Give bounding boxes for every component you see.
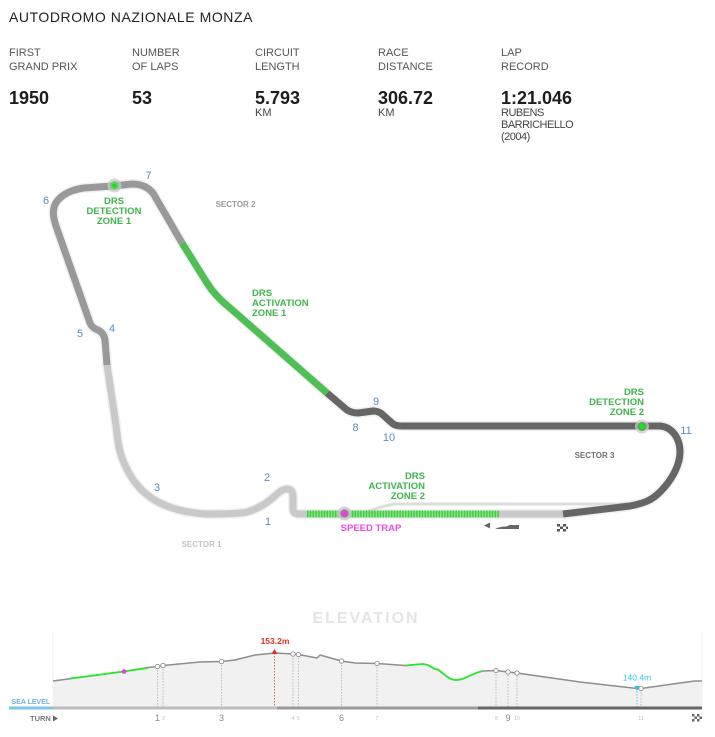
- sea level bar: [9, 706, 53, 710]
- track halo: [53, 184, 680, 514]
- turn markers: [155, 652, 643, 691]
- stat: first grand prix: 1950: [9, 88, 49, 108]
- turn numbers: 11: [680, 425, 692, 437]
- sector 1 track: [107, 365, 563, 514]
- turn numbers: 6: [43, 195, 49, 207]
- stat: lap record: LAP: [501, 46, 522, 58]
- label: DRS activation zone 2: DRS: [405, 471, 425, 482]
- turn axis labels: [155, 713, 644, 723]
- stat: number of laps: 53: [132, 88, 152, 108]
- stat: number of laps: OF LAPS: [132, 60, 178, 72]
- turn axis labels: 5: [297, 716, 300, 722]
- turn numbers: 2: [264, 472, 270, 484]
- label: DRS detection zone 1: DETECTION: [87, 206, 142, 217]
- lowest point: 140.4m: [623, 672, 651, 682]
- DRS segment 1: [70, 668, 148, 678]
- turn axis labels: 11: [638, 716, 644, 722]
- turn axis labels: 2: [162, 716, 165, 722]
- sector 1 bar: [53, 706, 277, 710]
- DRS detection point 2: [635, 420, 649, 434]
- turn numbers: 3: [154, 482, 160, 494]
- turn drop lines: [158, 655, 641, 707]
- label: DRS activation zone 1: ZONE 1: [252, 308, 287, 319]
- stat: circuit length: CIRCUIT: [255, 46, 300, 58]
- stat: first grand prix: FIRST: [9, 46, 41, 58]
- label: DRS detection zone 2: DETECTION: [589, 397, 644, 408]
- icon: finish flag: [692, 714, 702, 722]
- label: DRS activation zone 2: ACTIVATION: [368, 481, 425, 492]
- speed trap point: [338, 506, 352, 520]
- label: DRS activation zone 1: ACTIVATION: [252, 298, 309, 309]
- icon: direction arrow and car: [484, 522, 519, 529]
- sector 2 track: [53, 184, 182, 365]
- turn axis labels: 8: [495, 716, 498, 722]
- stat: lap record: (2004): [501, 131, 530, 143]
- turn numbers: 10: [383, 432, 395, 444]
- DRS segment 2: [405, 664, 483, 680]
- stat: lap record: [501, 46, 574, 143]
- DRS activation zone 2: [307, 510, 499, 518]
- turn numbers: 5: [77, 328, 83, 340]
- turn axis labels: 9: [505, 713, 511, 723]
- stat: circuit length: 5.793: [255, 88, 300, 108]
- stat: first grand prix: GRAND PRIX: [9, 60, 77, 72]
- sector labels: [182, 200, 615, 549]
- stat: race distance: 306.72: [378, 88, 433, 108]
- highest point: 153.2m: [261, 636, 290, 646]
- stat: number of laps: NUMBER: [132, 46, 180, 58]
- DRS activation zone 1: [182, 243, 327, 393]
- turn axis labels: 3: [219, 713, 224, 723]
- stat: lap record: RUBENS: [501, 107, 544, 119]
- stat: race distance: KM: [378, 107, 394, 119]
- stat: circuit length: LENGTH: [255, 60, 300, 72]
- stat: circuit length: KM: [255, 107, 272, 119]
- turn label: TURN: [30, 714, 51, 723]
- stat: race distance: DISTANCE: [378, 60, 433, 72]
- stat: race distance: RACE: [378, 46, 409, 58]
- label: DRS detection zone 1: ZONE 1: [97, 216, 132, 227]
- stat: first grand prix: [9, 46, 78, 108]
- sector labels: SECTOR 3: [575, 451, 615, 460]
- label: DRS detection zone 2: DRS: [624, 387, 644, 398]
- stat: lap record: RECORD: [501, 60, 549, 72]
- sector labels: SECTOR 1: [182, 540, 222, 549]
- turn axis labels: 4: [292, 716, 295, 722]
- label: speed trap: SPEED TRAP: [341, 523, 402, 534]
- elevation chart: [9, 632, 702, 723]
- turn numbers: 4: [109, 323, 115, 335]
- label: DRS detection zone 1: DRS: [104, 196, 124, 207]
- sector 2 bar: [277, 706, 478, 710]
- circuit map: [53, 178, 680, 520]
- elevation area: [53, 653, 702, 707]
- turn axis labels: 10: [514, 716, 520, 722]
- stat: lap record: BARRICHELLO: [501, 119, 573, 131]
- speed trap marker: [122, 669, 126, 674]
- sector labels: SECTOR 2: [216, 200, 256, 209]
- turn numbers: [43, 170, 692, 528]
- elevation heading: ELEVATION: [312, 610, 420, 627]
- title: AUTODROMO NAZIONALE MONZA: [9, 9, 253, 25]
- stat: race distance: [378, 46, 433, 119]
- elevation line: [53, 653, 702, 688]
- stat: lap record: 1:21.046: [501, 88, 572, 108]
- label: DRS activation zone 2: ZONE 2: [391, 491, 425, 502]
- turn axis labels: 6: [339, 713, 344, 723]
- icon: chequered flag: [557, 524, 568, 532]
- turn axis labels: 7: [376, 716, 379, 722]
- DRS detection point 1: [108, 178, 122, 192]
- highest point: [261, 636, 290, 707]
- lowest point: [623, 672, 651, 707]
- label: DRS activation zone 1: DRS: [252, 288, 272, 299]
- stat: circuit length: [255, 46, 300, 119]
- turn numbers: 8: [352, 422, 359, 434]
- turn numbers: 1: [265, 516, 271, 528]
- turn numbers: 9: [373, 396, 379, 408]
- chart end lines: [53, 632, 702, 707]
- sea level label: SEA LEVEL: [12, 699, 51, 706]
- sector 3 bar: [478, 706, 702, 710]
- sector 3 track: [327, 393, 680, 514]
- turn axis labels: 1: [155, 713, 160, 723]
- turn numbers: 7: [145, 170, 152, 182]
- pit lane: [367, 501, 653, 512]
- label: DRS detection zone 2: ZONE 2: [610, 407, 644, 418]
- stat: number of laps: [132, 46, 180, 108]
